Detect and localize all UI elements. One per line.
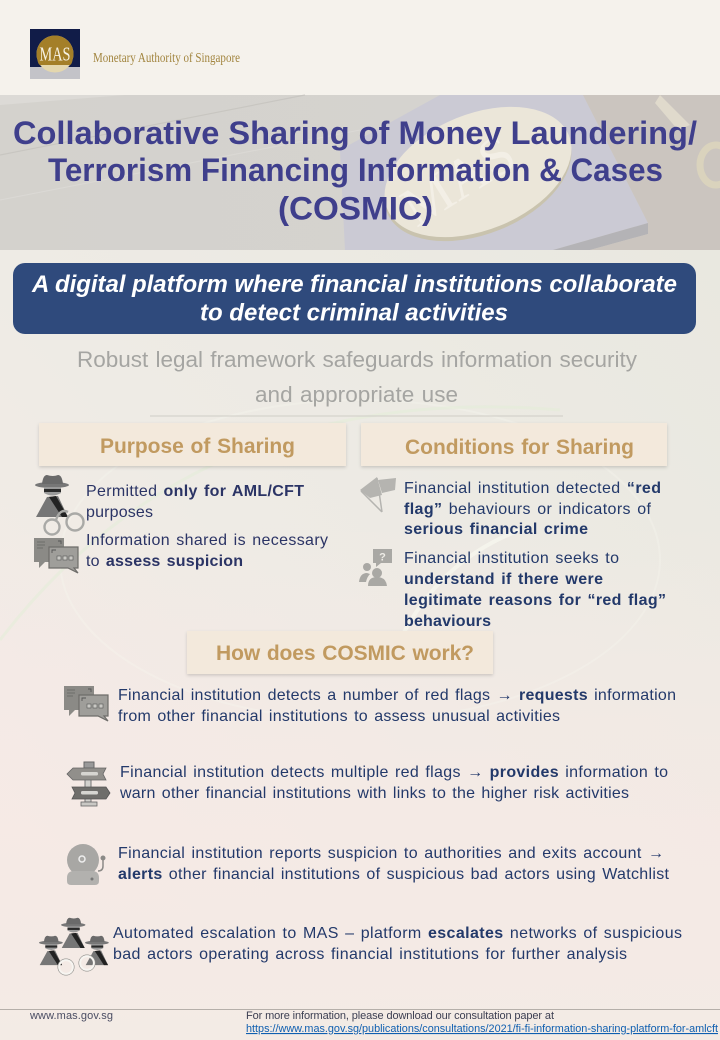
text: red flag behaviours: serious financial crime bbox=[404, 521, 588, 538]
step: alerts bbox=[67, 844, 670, 885]
panel: conditions for sharing bbox=[359, 423, 667, 630]
step: requests bbox=[64, 686, 676, 725]
title: (COSMIC) bbox=[278, 190, 433, 226]
footer: more information bbox=[246, 1010, 718, 1035]
title: Collaborative Sharing of Money Laundering/ bbox=[13, 115, 697, 151]
footer: more information: https://www.mas.gov.sg/publications/consultations/2021/fi-fi-information-sharing-platform-for-amlcft bbox=[246, 1023, 718, 1035]
text: red flag behaviours: flag” behaviours or indicators of bbox=[404, 501, 651, 518]
title: Terrorism Financing Information & Cases bbox=[48, 152, 663, 188]
logo wordmark: Monetary Authority of Singapore bbox=[93, 50, 240, 65]
text: understand reasons: behaviours bbox=[404, 613, 491, 630]
heading: conditions for sharing: Conditions for Sharing bbox=[405, 436, 634, 459]
logo: MAS bbox=[30, 29, 80, 79]
subtitle banner bbox=[13, 263, 696, 334]
icon: signpost bbox=[67, 762, 110, 806]
text: provides information: Financial institution detects multiple red flags → provides information to bbox=[120, 764, 668, 781]
text: permitted purposes: Permitted only for AML/CFT bbox=[86, 483, 304, 500]
statement: Robust legal framework safeguards information security bbox=[77, 347, 638, 372]
text: understand reasons: Financial institution seeks to bbox=[404, 550, 619, 567]
text: provides information: warn other financial institutions with links to the higher risk activities bbox=[119, 785, 629, 802]
text: understand reasons: legitimate reasons for “red flag” bbox=[404, 592, 666, 609]
heading: purpose of sharing: Purpose of Sharing bbox=[100, 435, 295, 458]
icon: chat bubbles bbox=[64, 686, 108, 721]
text: assess suspicion: to assess suspicion bbox=[86, 553, 243, 570]
icon: spy with handcuffs bbox=[35, 475, 84, 534]
logo: MAS: MAS bbox=[40, 44, 70, 66]
icon: red flags bbox=[360, 477, 396, 512]
text: escalates networks: bad actors operating across financial institutions for further analysis bbox=[113, 946, 627, 963]
statement bbox=[77, 347, 638, 407]
hero banner bbox=[0, 82, 720, 266]
icon: alarm bell bbox=[67, 844, 106, 885]
text: alerts institutions: alerts other financial institutions of suspicious bad actors using Watchlist bbox=[118, 866, 669, 883]
title bbox=[13, 115, 697, 226]
footer: more information: For more information, please download our consultation paper at bbox=[246, 1010, 554, 1022]
subtitle banner: to detect criminal activities bbox=[200, 300, 508, 326]
icon: group of spies with handcuffs bbox=[39, 918, 109, 975]
text: requests information: Financial institution detects a number of red flags → requests information bbox=[118, 687, 676, 704]
footer: website: www.mas.gov.sg bbox=[29, 1010, 113, 1022]
text: escalates networks: Automated escalation to MAS – platform escalates networks of suspicious bbox=[113, 925, 682, 942]
text: assess suspicion: Information shared is necessary bbox=[86, 532, 328, 549]
heading: conditions for sharing bbox=[361, 423, 667, 466]
step: escalates bbox=[39, 918, 682, 975]
icon: people with question: ? bbox=[379, 552, 386, 564]
text: understand reasons: understand if there were bbox=[404, 571, 603, 588]
icon: people with question bbox=[359, 549, 392, 586]
heading: purpose of sharing bbox=[39, 423, 346, 466]
icon: chat bubbles bbox=[34, 538, 78, 573]
text: permitted purposes: purposes bbox=[86, 504, 153, 521]
step: provides bbox=[67, 762, 668, 806]
text: requests information: from other financial institutions to assess unusual activities bbox=[118, 708, 560, 725]
hero banner: MAS bbox=[391, 122, 526, 239]
heading: how does COSMIC work: How does COSMIC work? bbox=[216, 642, 474, 665]
heading: how does COSMIC work bbox=[187, 631, 493, 674]
text: red flag behaviours: Financial institution detected “red bbox=[404, 480, 661, 497]
subtitle banner: A digital platform where financial institutions collaborate bbox=[31, 271, 677, 298]
statement: and appropriate use bbox=[255, 382, 458, 407]
panel: purpose of sharing bbox=[34, 423, 346, 573]
text: alerts institutions: Financial institution reports suspicion to authorities and exits account → bbox=[118, 845, 664, 862]
